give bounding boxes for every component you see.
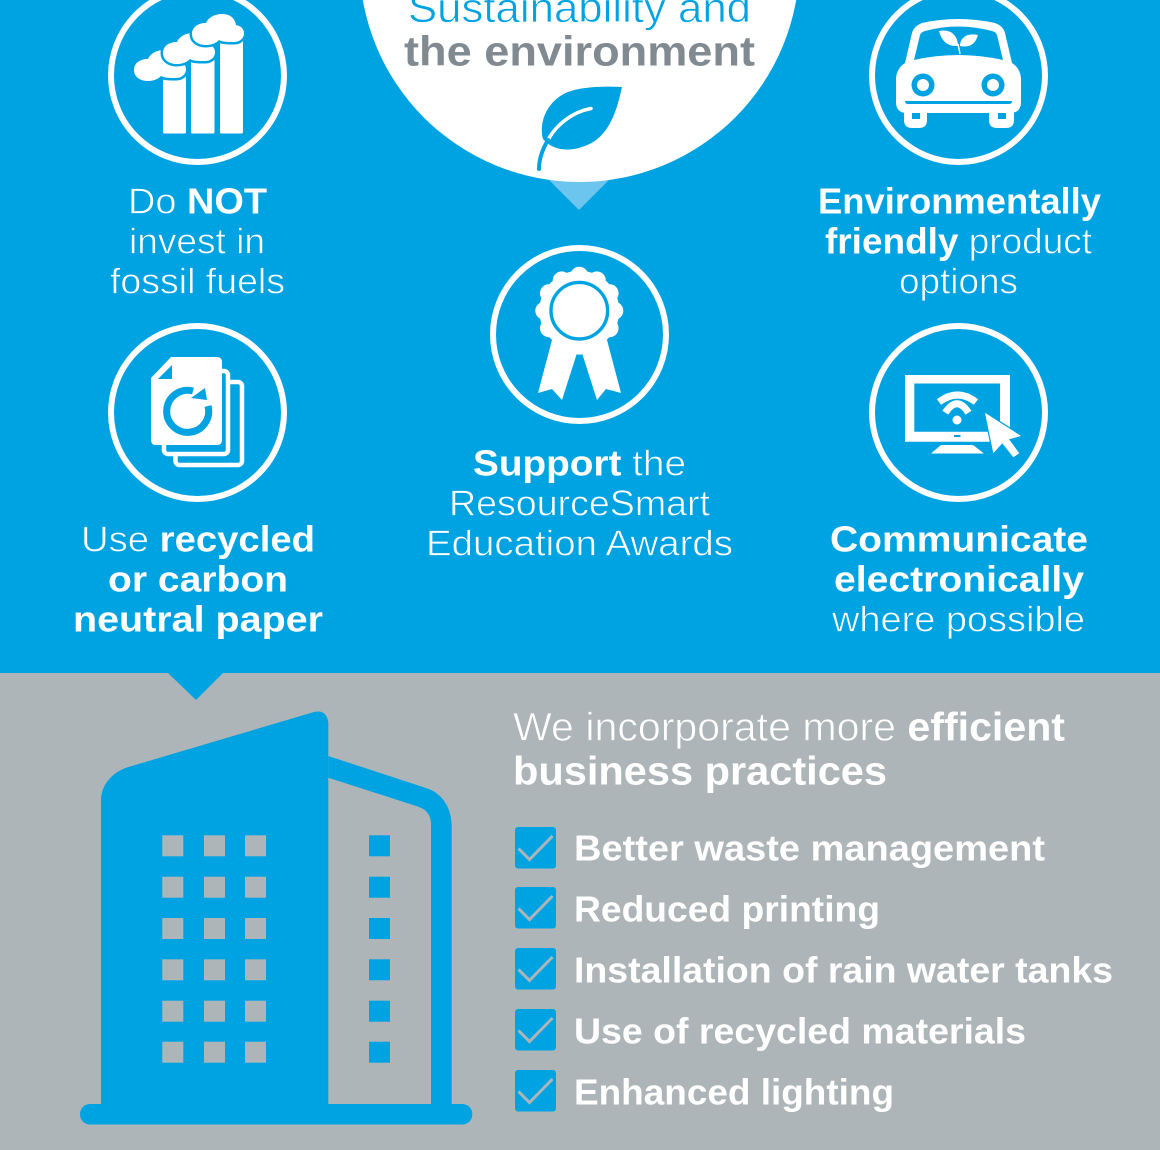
text: use recycled paper: or carbon — [108, 558, 288, 600]
text: support awards: ResourceSmart — [449, 482, 710, 524]
checklist — [515, 827, 1113, 1112]
heading: efficient business practices — [513, 706, 1065, 794]
text: environmentally friendly: options — [899, 260, 1018, 302]
text: do not invest: Do NOT — [128, 180, 267, 222]
icon: recycled paper stack — [111, 326, 284, 499]
text: do not invest: invest in — [129, 220, 265, 262]
text: do not invest: fossil fuels — [110, 260, 285, 302]
text: use recycled paper: Use recycled — [81, 518, 315, 560]
list item: recycled materials: Use of recycled materials — [574, 1010, 1026, 1052]
icon: monitor with wifi and cursor — [872, 326, 1045, 499]
text: environmentally friendly: friendly product — [825, 220, 1092, 262]
text: communicate electronically — [830, 518, 1088, 640]
item: recycled or carbon neutral paper — [73, 326, 323, 700]
text: use recycled paper: neutral paper — [73, 598, 323, 640]
text: communicate electronically: where possible — [831, 598, 1085, 640]
white circle — [360, 0, 800, 182]
list item: rain water tanks: Installation of rain water tanks — [574, 950, 1113, 990]
list item: enhanced lighting: Enhanced lighting — [574, 1072, 894, 1112]
list item: reduced printing: Reduced printing — [574, 888, 880, 930]
icon: award ribbon — [493, 248, 666, 421]
text: support awards: Support the — [473, 442, 686, 484]
heading: efficient business practices: business practices — [513, 750, 887, 794]
title: the environment — [404, 28, 755, 74]
list item: better waste management: Better waste management — [574, 828, 1045, 868]
item: environmentally friendly product options — [818, 0, 1101, 302]
item: do not invest in fossil fuels — [110, 0, 285, 302]
icon: leaf — [539, 87, 622, 169]
item: support the ResourceSmart Education Awards — [426, 248, 733, 564]
panel: blue background — [0, 0, 1160, 673]
pointer: blue triangle into grey panel — [168, 673, 223, 700]
text: communicate electronically: electronically — [834, 558, 1084, 600]
icon: factory chimneys with clouds — [111, 0, 284, 162]
heading: efficient business practices: We incorporate more efficient — [513, 706, 1065, 750]
text: communicate electronically: Communicate — [830, 518, 1088, 560]
text: support awards: Education Awards — [426, 522, 733, 564]
building windows — [162, 835, 266, 1063]
icon: car with leaves — [872, 0, 1045, 162]
text: environmentally friendly: Environmentally — [818, 180, 1101, 222]
item: communicate electronically — [830, 326, 1088, 640]
text: do not invest — [110, 180, 285, 302]
text: environmentally friendly — [818, 180, 1101, 302]
panel: grey business practices background — [0, 673, 1160, 1150]
text: use recycled paper — [73, 518, 323, 640]
wing windows — [369, 835, 390, 1063]
icon: office building — [80, 711, 472, 1124]
title — [404, 0, 755, 74]
pointer: light blue triangle — [549, 180, 609, 210]
panel: central white title circle — [360, 0, 800, 210]
text: support awards — [426, 442, 733, 564]
